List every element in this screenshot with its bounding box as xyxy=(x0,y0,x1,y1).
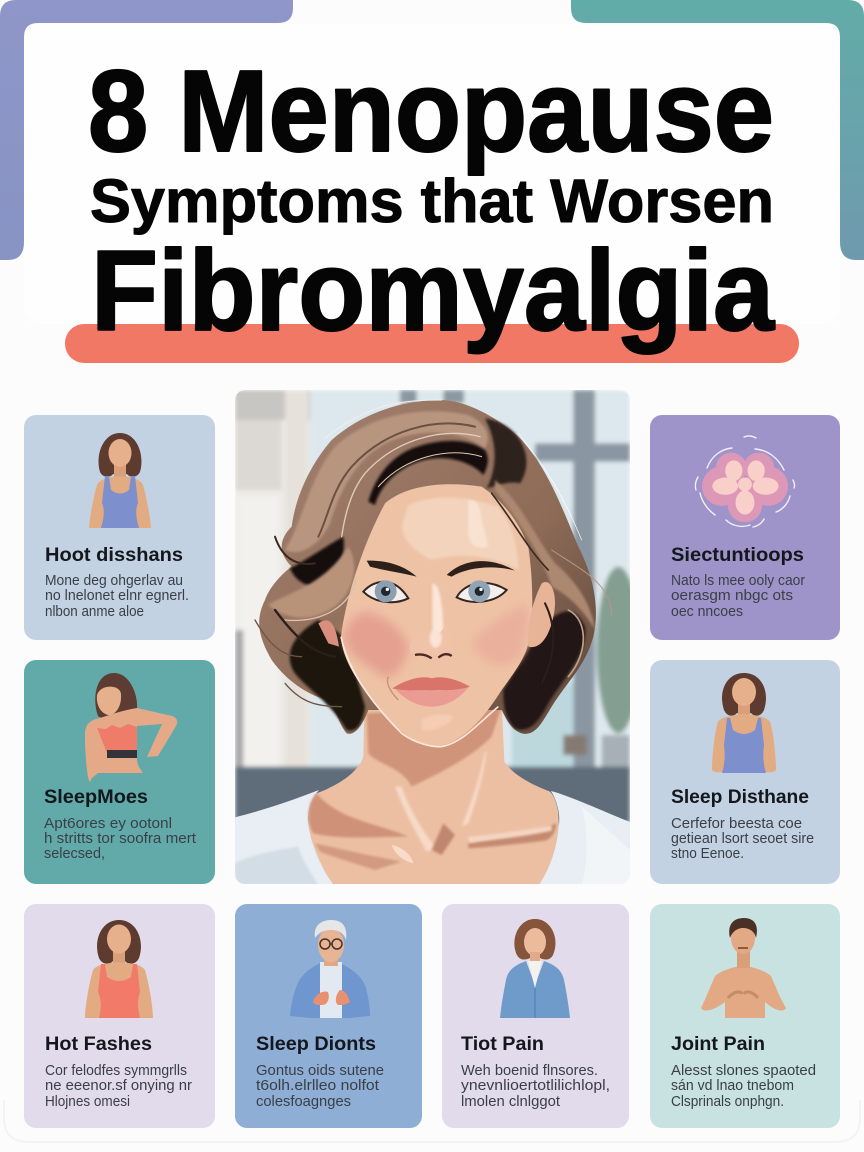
card description: oerasgm nbgc ots xyxy=(671,588,793,604)
icon: pink brain-like flower xyxy=(695,436,795,527)
card description: Nato ls mee ooly caor xyxy=(671,573,805,589)
card description: getiean lsort seoet sire xyxy=(671,831,814,847)
title: Symptoms that Worsen xyxy=(90,167,774,235)
card description: lmolen clnlggot xyxy=(461,1094,560,1110)
card heading: Tiot Pain xyxy=(461,1033,544,1055)
card description: ynevnlioertotlilichlopl, xyxy=(461,1078,610,1094)
icon: woman in blue blazer xyxy=(500,919,570,1018)
face xyxy=(318,484,555,747)
card heading: SleepMoes xyxy=(44,786,148,808)
card description: Hlojnes omesi xyxy=(45,1094,130,1110)
panel: hot flashes card bottom xyxy=(24,904,215,1128)
card description: Clsprinals onphgn. xyxy=(671,1094,784,1110)
card description: Cor felodfes symmgrlls xyxy=(45,1063,187,1079)
icon: woman holding side xyxy=(85,673,177,782)
card heading: Hot Fashes xyxy=(45,1033,152,1055)
teal corner accent xyxy=(571,0,864,260)
card heading: Sleep Disthane xyxy=(671,786,809,808)
card description xyxy=(671,1063,816,1110)
card heading: Joint Pain xyxy=(671,1033,765,1055)
card description: Cerfefor beesta coe xyxy=(671,816,802,832)
hair highlights xyxy=(268,411,595,630)
card heading: Siectuntioops xyxy=(671,544,804,566)
card description: ne eeenor.sf onying nr xyxy=(45,1078,192,1094)
card description xyxy=(671,816,814,862)
panel: card with woman in blazer xyxy=(442,904,629,1128)
hair front strands xyxy=(255,400,612,707)
panel: central portrait illustration xyxy=(235,390,640,885)
coral title underline xyxy=(65,324,799,363)
card description: nlbon anme aloe xyxy=(45,604,144,620)
icon: woman in coral tank top xyxy=(85,920,153,1018)
eyebrows xyxy=(367,561,417,577)
shirt xyxy=(235,790,630,885)
card description: Alesst slones spaoted xyxy=(671,1063,816,1079)
card description xyxy=(256,1063,384,1110)
panel: joint pain card xyxy=(650,904,840,1128)
card description: sán vd lnao tnebom xyxy=(671,1078,794,1094)
eyes xyxy=(363,580,507,602)
title: Fibromyalgia xyxy=(91,228,776,355)
icon: shirtless man with hands on chest xyxy=(701,918,786,1018)
neck and chest xyxy=(308,700,559,885)
panel: hot flashes card top left xyxy=(24,415,215,640)
card description xyxy=(44,816,196,862)
card heading: Sleep Dionts xyxy=(256,1033,376,1055)
panel: sleep disturbance card right xyxy=(650,660,840,884)
card description: oec nncoes xyxy=(671,604,743,620)
card description: t6olh.elrlleo nolfot xyxy=(256,1078,379,1094)
lips xyxy=(392,677,470,707)
title xyxy=(88,46,776,355)
purple corner accent xyxy=(0,0,293,260)
card description: selecsed, xyxy=(44,846,105,862)
card description: Weh boenid flnsores. xyxy=(461,1063,598,1079)
panel: sleep card left teal xyxy=(24,660,215,884)
title: 8 Menopause xyxy=(88,46,774,176)
card description xyxy=(45,573,189,620)
hair shadows xyxy=(290,418,585,731)
card description xyxy=(45,1063,192,1110)
card heading: Hoot disshans xyxy=(45,544,183,566)
card description: h stritts tor soofra mert xyxy=(44,831,196,847)
right ear xyxy=(528,582,555,647)
left ear xyxy=(318,620,339,647)
card description: Mone deg ohgerlav au xyxy=(45,573,183,589)
icon: woman in blue tank top xyxy=(89,433,151,528)
card description: colesfoagnges xyxy=(256,1094,351,1110)
card description: no lnelonet elnr egnerl. xyxy=(45,588,189,604)
panel: sleep card with older man xyxy=(235,904,422,1128)
card description xyxy=(461,1063,610,1110)
card description xyxy=(671,573,805,620)
card description: Apt6ores ey ootonl xyxy=(44,816,172,832)
icon: woman in blue tank top xyxy=(712,673,776,773)
card description: stno Eenoe. xyxy=(671,846,744,862)
hair back mass xyxy=(259,400,596,734)
nose xyxy=(410,628,444,650)
icon: older man in blue jacket xyxy=(290,920,370,1018)
panel: purple card top right xyxy=(650,415,840,640)
blurred room background xyxy=(235,390,640,885)
card description: Gontus oids sutene xyxy=(256,1063,384,1079)
